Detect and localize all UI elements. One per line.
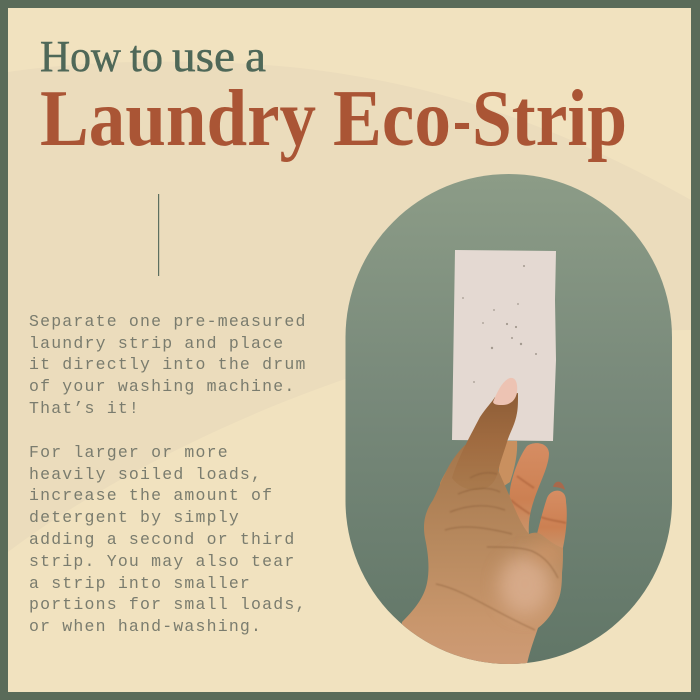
hand and wrist <box>402 378 563 664</box>
heading: Laundry Eco-Strip <box>40 75 627 163</box>
arch background <box>346 174 672 664</box>
paragraph: larger loads: heavily soiled loads, <box>29 465 262 484</box>
paragraph: larger loads: adding a second or third <box>29 530 295 549</box>
thumbnail <box>493 378 517 405</box>
heading: How to use a <box>40 32 266 81</box>
background wave band <box>8 62 691 552</box>
back fingers <box>440 441 567 552</box>
heading: How to use a: to <box>130 32 163 81</box>
paragraph: larger loads: or when hand-washing. <box>29 617 262 636</box>
paragraph: larger loads <box>29 443 307 636</box>
paragraph: instructions <box>29 312 307 418</box>
paragraph: instructions: That’s it! <box>29 399 140 418</box>
finger joint creases <box>511 476 566 523</box>
heading: How to use a: use <box>172 32 235 81</box>
heading: Laundry Eco-Strip: Laundry <box>40 75 316 163</box>
heading: How to use a: How <box>40 32 121 81</box>
paragraph: larger loads: a strip into smaller <box>29 574 251 593</box>
body text <box>29 312 307 636</box>
heading: Laundry Eco-Strip: Strip <box>472 75 627 163</box>
paragraph: larger loads: strip. You may also tear <box>29 552 295 571</box>
paragraph: instructions: it directly into the drum <box>29 355 307 374</box>
vertical divider line <box>158 194 159 276</box>
paragraph: larger loads: portions for small loads, <box>29 595 307 614</box>
paragraph: larger loads: For larger or more <box>29 443 229 462</box>
eco-strip <box>452 250 556 441</box>
heading: Laundry Eco-Strip: - <box>453 75 471 163</box>
paragraph: larger loads: increase the amount of <box>29 486 273 505</box>
hand creases <box>436 473 558 630</box>
heading: How to use a: a <box>245 32 266 81</box>
palm highlight <box>499 555 551 615</box>
upper palm orange shade <box>539 542 559 558</box>
strip seed specks <box>462 265 537 383</box>
paragraph: instructions: Separate one pre-measured <box>29 312 307 331</box>
photo: hand holding eco-strip in arch <box>346 174 672 680</box>
paragraph: instructions: of your washing machine. <box>29 377 295 396</box>
paragraph: instructions: laundry strip and place <box>29 334 284 353</box>
paragraph: larger loads: detergent by simply <box>29 508 240 527</box>
heading: Laundry Eco-Strip: Eco <box>333 75 451 163</box>
thumb <box>454 393 518 472</box>
